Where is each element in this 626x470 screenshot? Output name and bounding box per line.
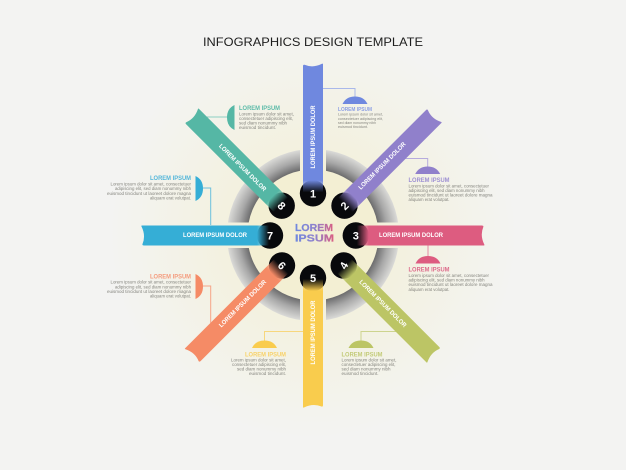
callout 5: sed diam nonummy nibh xyxy=(237,366,287,372)
spoke 7: LOREM IPSUM DOLOR xyxy=(183,232,248,239)
callout 7: euismod tincidunt ut laoreet dolore magna xyxy=(107,191,192,196)
callout 4: consectetuer adipiscing elit, xyxy=(342,362,396,367)
callout 4: sed diam nonummy nibh xyxy=(342,366,391,372)
spoke 4: 4 xyxy=(338,260,352,272)
callout 7: adipiscing elit, sed diam nonummy nibh xyxy=(115,186,192,191)
callout 7 xyxy=(107,176,211,225)
callout 8: euismod tincidunt. xyxy=(239,125,276,130)
callout 6: LOREM IPSUM xyxy=(150,274,191,280)
callout 8: consectetuer adipiscing elit, xyxy=(239,116,293,121)
callout 8: LOREM IPSUM xyxy=(239,106,280,112)
spoke 6 xyxy=(185,252,295,363)
spoke 1: LOREM IPSUM DOLOR xyxy=(310,105,317,168)
callout 3: euismod tincidunt ut laoreet dolore magna xyxy=(408,282,493,287)
spoke 2 xyxy=(331,108,442,219)
callout 8: sed diam nonummy nibh xyxy=(239,120,288,126)
callout 2 xyxy=(404,158,493,202)
spoke 8 xyxy=(184,108,295,219)
callout 5: Lorem ipsum dolor sit amet, xyxy=(231,358,286,362)
callout 5: consectetuer adipiscing elit, xyxy=(232,362,286,367)
spoke 2: LOREM IPSUM DOLOR xyxy=(357,141,408,191)
spoke 5: 5 xyxy=(310,273,316,285)
callout 1: LOREM IPSUM xyxy=(338,107,372,113)
callout 1: Lorem ipsum dolor sit amet, xyxy=(338,112,383,116)
callout 3: aliquam erat volutpat. xyxy=(408,287,450,292)
callout 3: adipiscing elit, sed diam nonummy nibh xyxy=(408,278,485,283)
callout 1: consectetuer adipiscing elit, xyxy=(338,117,383,121)
callout 7: aliquam erat volutpat. xyxy=(150,195,191,200)
background glow xyxy=(108,30,518,440)
callout 4: Lorem ipsum dolor sit amet, xyxy=(342,358,396,362)
centre label xyxy=(295,222,334,244)
callout 3: Lorem ipsum dolor sit amet, consectetuer xyxy=(408,273,490,278)
callout 7: Lorem ipsum dolor sit amet, consectetuer xyxy=(110,182,192,186)
callout 1: sed diam nonummy nibh xyxy=(338,121,376,125)
callout 2: LOREM IPSUM xyxy=(408,178,450,184)
callout 2: Lorem ipsum dolor sit amet, consectetuer xyxy=(408,184,490,188)
callout 2: euismod tincidunt ut laoreet dolore magna xyxy=(408,193,493,198)
spoke 3: LOREM IPSUM DOLOR xyxy=(379,232,444,239)
callout 6: Lorem ipsum dolor sit amet, consectetuer xyxy=(110,280,192,285)
callout 2: aliquam erat volutpat. xyxy=(408,197,450,202)
spoke 7: 7 xyxy=(267,230,273,242)
callout 2: adipiscing elit, sed diam nonummy nibh xyxy=(408,188,485,193)
spoke 5 xyxy=(300,265,326,408)
callout 5: LOREM IPSUM xyxy=(245,352,286,358)
callout 3 xyxy=(408,245,493,292)
callout 3: LOREM IPSUM xyxy=(408,267,450,273)
spoke 3 xyxy=(343,222,484,249)
grey segmented ring xyxy=(227,149,399,321)
callout 1: euismod tincidunt. xyxy=(338,125,368,129)
callout 4 xyxy=(342,332,398,376)
spoke 1 xyxy=(300,64,326,206)
callout 4: euismod tincidunt. xyxy=(342,371,378,376)
centre label: LOREM xyxy=(295,222,333,234)
callout 6 xyxy=(107,274,211,323)
callout 7: LOREM IPSUM xyxy=(150,176,191,182)
callout 5: euismod tincidunt. xyxy=(249,371,286,376)
spoke 7 xyxy=(141,222,283,249)
spoke 1: 1 xyxy=(310,188,316,200)
central cream disc xyxy=(248,170,378,300)
centre label: IPSUM xyxy=(295,232,334,244)
callout 6: adipiscing elit, sed diam nonummy nibh xyxy=(115,284,192,289)
spoke 6: 6 xyxy=(275,260,288,273)
callout 6: euismod tincidunt ut laoreet dolore magna xyxy=(107,289,192,294)
callout 1 xyxy=(323,88,383,129)
spoke 5: LOREM IPSUM DOLOR xyxy=(310,300,317,364)
callout 4: LOREM IPSUM xyxy=(342,352,382,358)
callout 6: aliquam erat volutpat. xyxy=(150,294,191,299)
spoke 8: 8 xyxy=(275,200,287,213)
spoke 3: 3 xyxy=(353,230,359,242)
spoke 6: LOREM IPSUM DOLOR xyxy=(218,278,268,329)
spoke 8: LOREM IPSUM DOLOR xyxy=(217,143,268,193)
callout 8: Lorem ipsum dolor sit amet, xyxy=(239,111,294,116)
spoke 4: LOREM IPSUM DOLOR xyxy=(357,279,408,329)
title: INFOGRAPHICS DESIGN TEMPLATE xyxy=(203,35,423,49)
callout 5 xyxy=(231,332,303,376)
spoke 2: 2 xyxy=(339,200,352,213)
callout 8 xyxy=(206,105,294,130)
spoke 4 xyxy=(330,252,441,363)
